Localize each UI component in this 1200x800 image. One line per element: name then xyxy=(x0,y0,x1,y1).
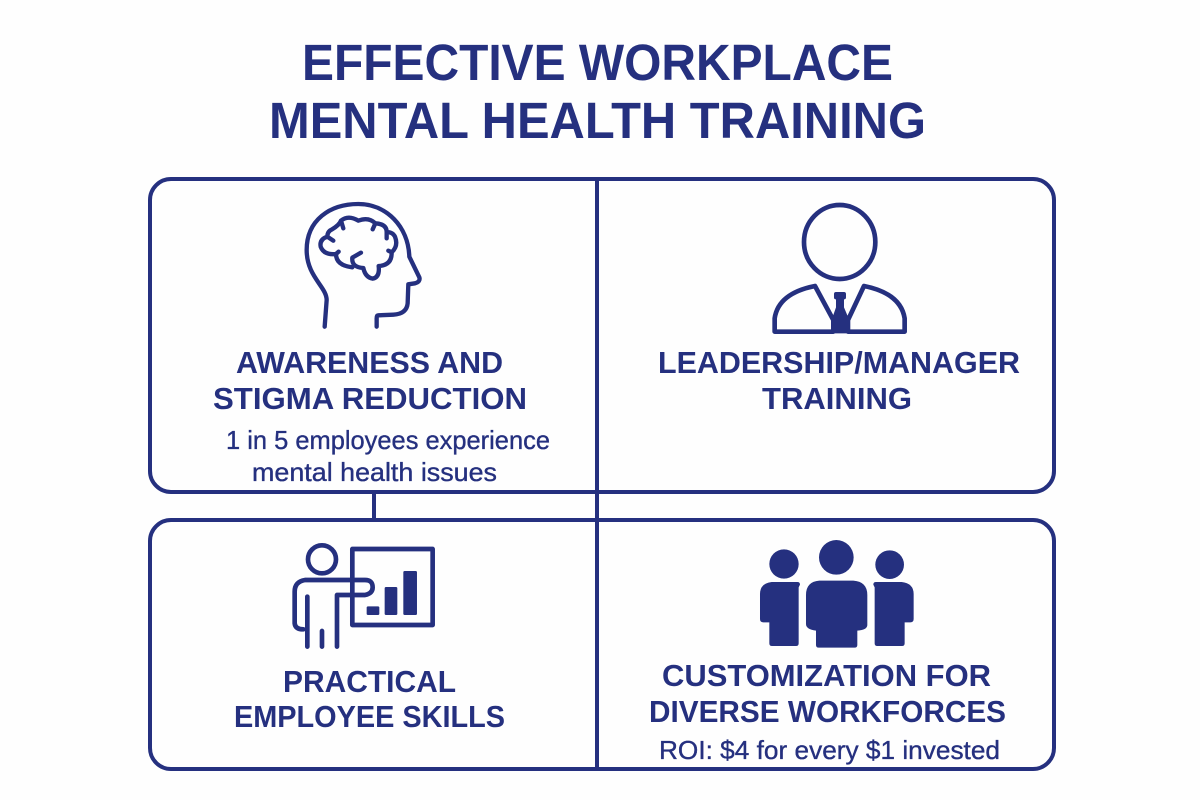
panel: awareness and stigma reduction xyxy=(213,204,550,487)
heading xyxy=(649,658,1006,729)
statistic text xyxy=(226,425,550,487)
heading: TRAINING xyxy=(762,381,912,416)
heading: EMPLOYEE SKILLS xyxy=(234,699,505,734)
ROI text: ROI: $4 for every $1 invested xyxy=(659,735,1000,765)
title: MENTAL HEALTH TRAINING xyxy=(269,92,926,149)
title: EFFECTIVE WORKPLACE xyxy=(302,34,893,91)
icon: head with brain xyxy=(307,204,420,327)
heading: DIVERSE WORKFORCES xyxy=(649,694,1006,729)
heading: AWARENESS AND xyxy=(236,345,503,380)
icon: manager with tie xyxy=(775,205,905,333)
panel: leadership manager training xyxy=(658,205,1020,416)
title xyxy=(269,34,926,149)
heading: STIGMA REDUCTION xyxy=(213,381,527,416)
icon: group of three people xyxy=(760,540,914,648)
icon: presenter with chart xyxy=(295,545,433,647)
heading: LEADERSHIP/MANAGER xyxy=(658,345,1020,380)
statistic text: 1 in 5 employees experience xyxy=(226,425,550,455)
statistic text: mental health issues xyxy=(252,457,497,487)
heading xyxy=(658,345,1020,416)
heading xyxy=(234,664,505,734)
heading: PRACTICAL xyxy=(283,664,456,699)
heading xyxy=(213,345,527,416)
panel frame: four-quadrant grid xyxy=(150,179,1054,769)
panel: customization for diverse workforces xyxy=(649,540,1006,765)
heading: CUSTOMIZATION FOR xyxy=(662,658,991,693)
panel: practical employee skills xyxy=(234,545,505,734)
